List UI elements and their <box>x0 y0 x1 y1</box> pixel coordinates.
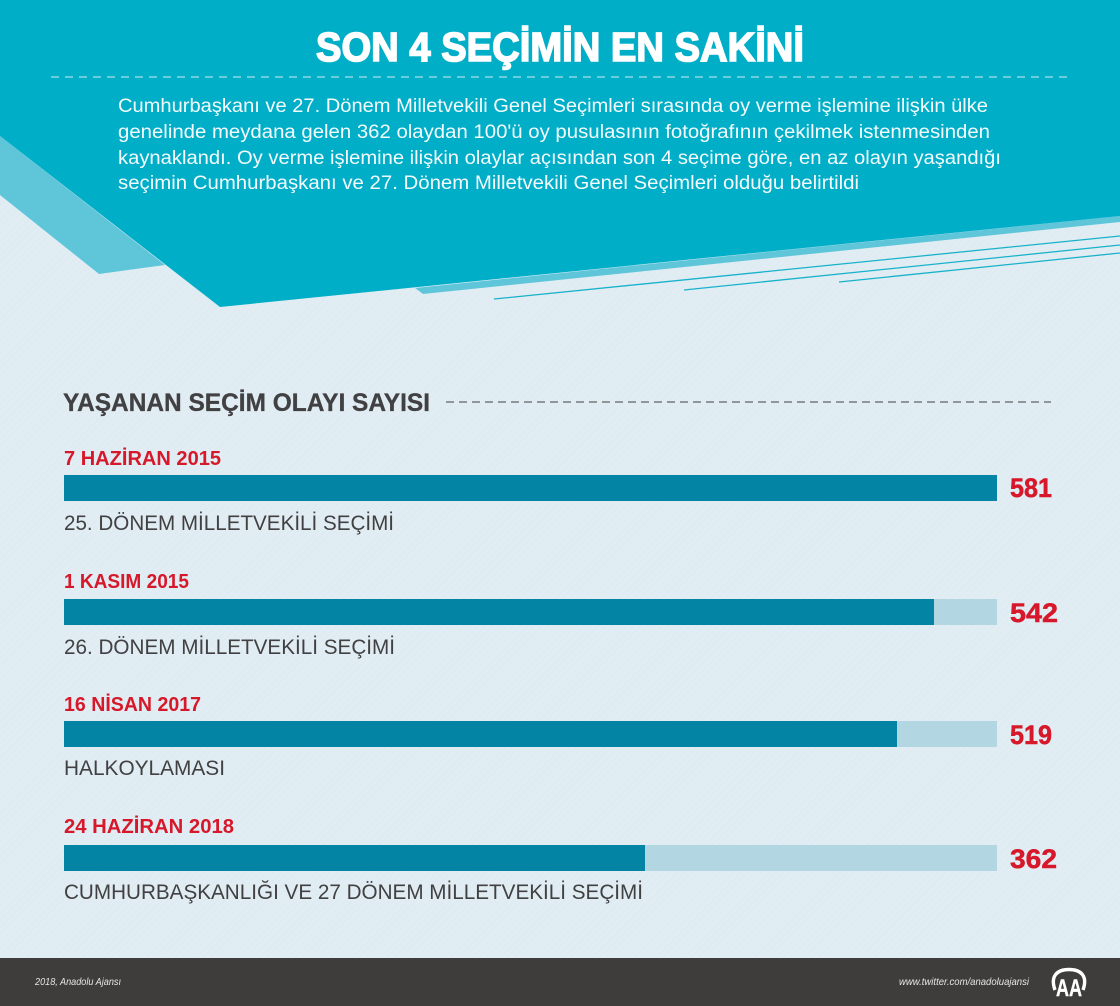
intro text <box>118 96 1001 194</box>
bar row: 7 Haziran 2015: 7 HAZİRAN 2015 <box>64 447 221 470</box>
bar row: 16 Nisan 2017: HALKOYLAMASI <box>64 757 225 780</box>
intro text: seçimin Cumhurbaşkanı ve 27. Dönem Milletvekili Genel Seçimleri olduğu belirtildi <box>118 173 859 194</box>
icon: Anadolu Agency logo <box>1053 970 1085 1002</box>
intro text: kaynaklandı. Oy verme işlemine ilişkin olaylar açısından son 4 seçime göre, en az olayın yaşandığı <box>118 148 1001 169</box>
bar row: 24 Haziran 2018 <box>64 815 1057 904</box>
title: SON 4 SEÇİMİN EN SAKİNİ <box>316 24 804 70</box>
section heading: YAŞANAN SEÇİM OLAYI SAYISI <box>63 389 430 417</box>
bar row: 1 Kasım 2015 <box>64 571 1058 659</box>
footer: 2018, Anadolu Ajansı <box>34 976 121 988</box>
bar row: 16 Nisan 2017: 519 <box>1010 720 1052 750</box>
header banner <box>0 0 1120 307</box>
intro text: Cumhurbaşkanı ve 27. Dönem Milletvekili Genel Seçimleri sırasında oy verme işlemine ilişkin ülke <box>118 96 988 117</box>
bar row: 24 Haziran 2018: 362 <box>1010 844 1057 874</box>
bar row: 24 Haziran 2018: CUMHURBAŞKANLIĞI VE 27 DÖNEM MİLLETVEKİLİ SEÇİMİ <box>64 881 643 904</box>
bar row: 16 Nisan 2017: 16 NİSAN 2017 <box>64 693 201 716</box>
footer <box>0 958 1120 1006</box>
bar row: 7 Haziran 2015 <box>64 447 1052 535</box>
bar row: 1 Kasım 2015: 26. DÖNEM MİLLETVEKİLİ SEÇİMİ <box>64 636 395 659</box>
bar row: 7 Haziran 2015: 581 <box>1010 473 1052 503</box>
icon: Anadolu Agency logo: AA <box>1056 975 1082 1002</box>
footer: www.twitter.com/anadoluajansi <box>899 976 1030 988</box>
bar row: 16 Nisan 2017 <box>64 693 1052 780</box>
bar row: 7 Haziran 2015: 25. DÖNEM MİLLETVEKİLİ SEÇİMİ <box>64 512 394 535</box>
bar row: 1 Kasım 2015: 542 <box>1010 598 1058 628</box>
bar row: 1 Kasım 2015: 1 KASIM 2015 <box>64 571 189 593</box>
intro text: genelinde meydana gelen 362 olaydan 100'ü oy pusulasının fotoğrafının çekilmek istenmesinden <box>118 122 990 143</box>
bar row: 24 Haziran 2018: 24 HAZİRAN 2018 <box>64 815 234 838</box>
